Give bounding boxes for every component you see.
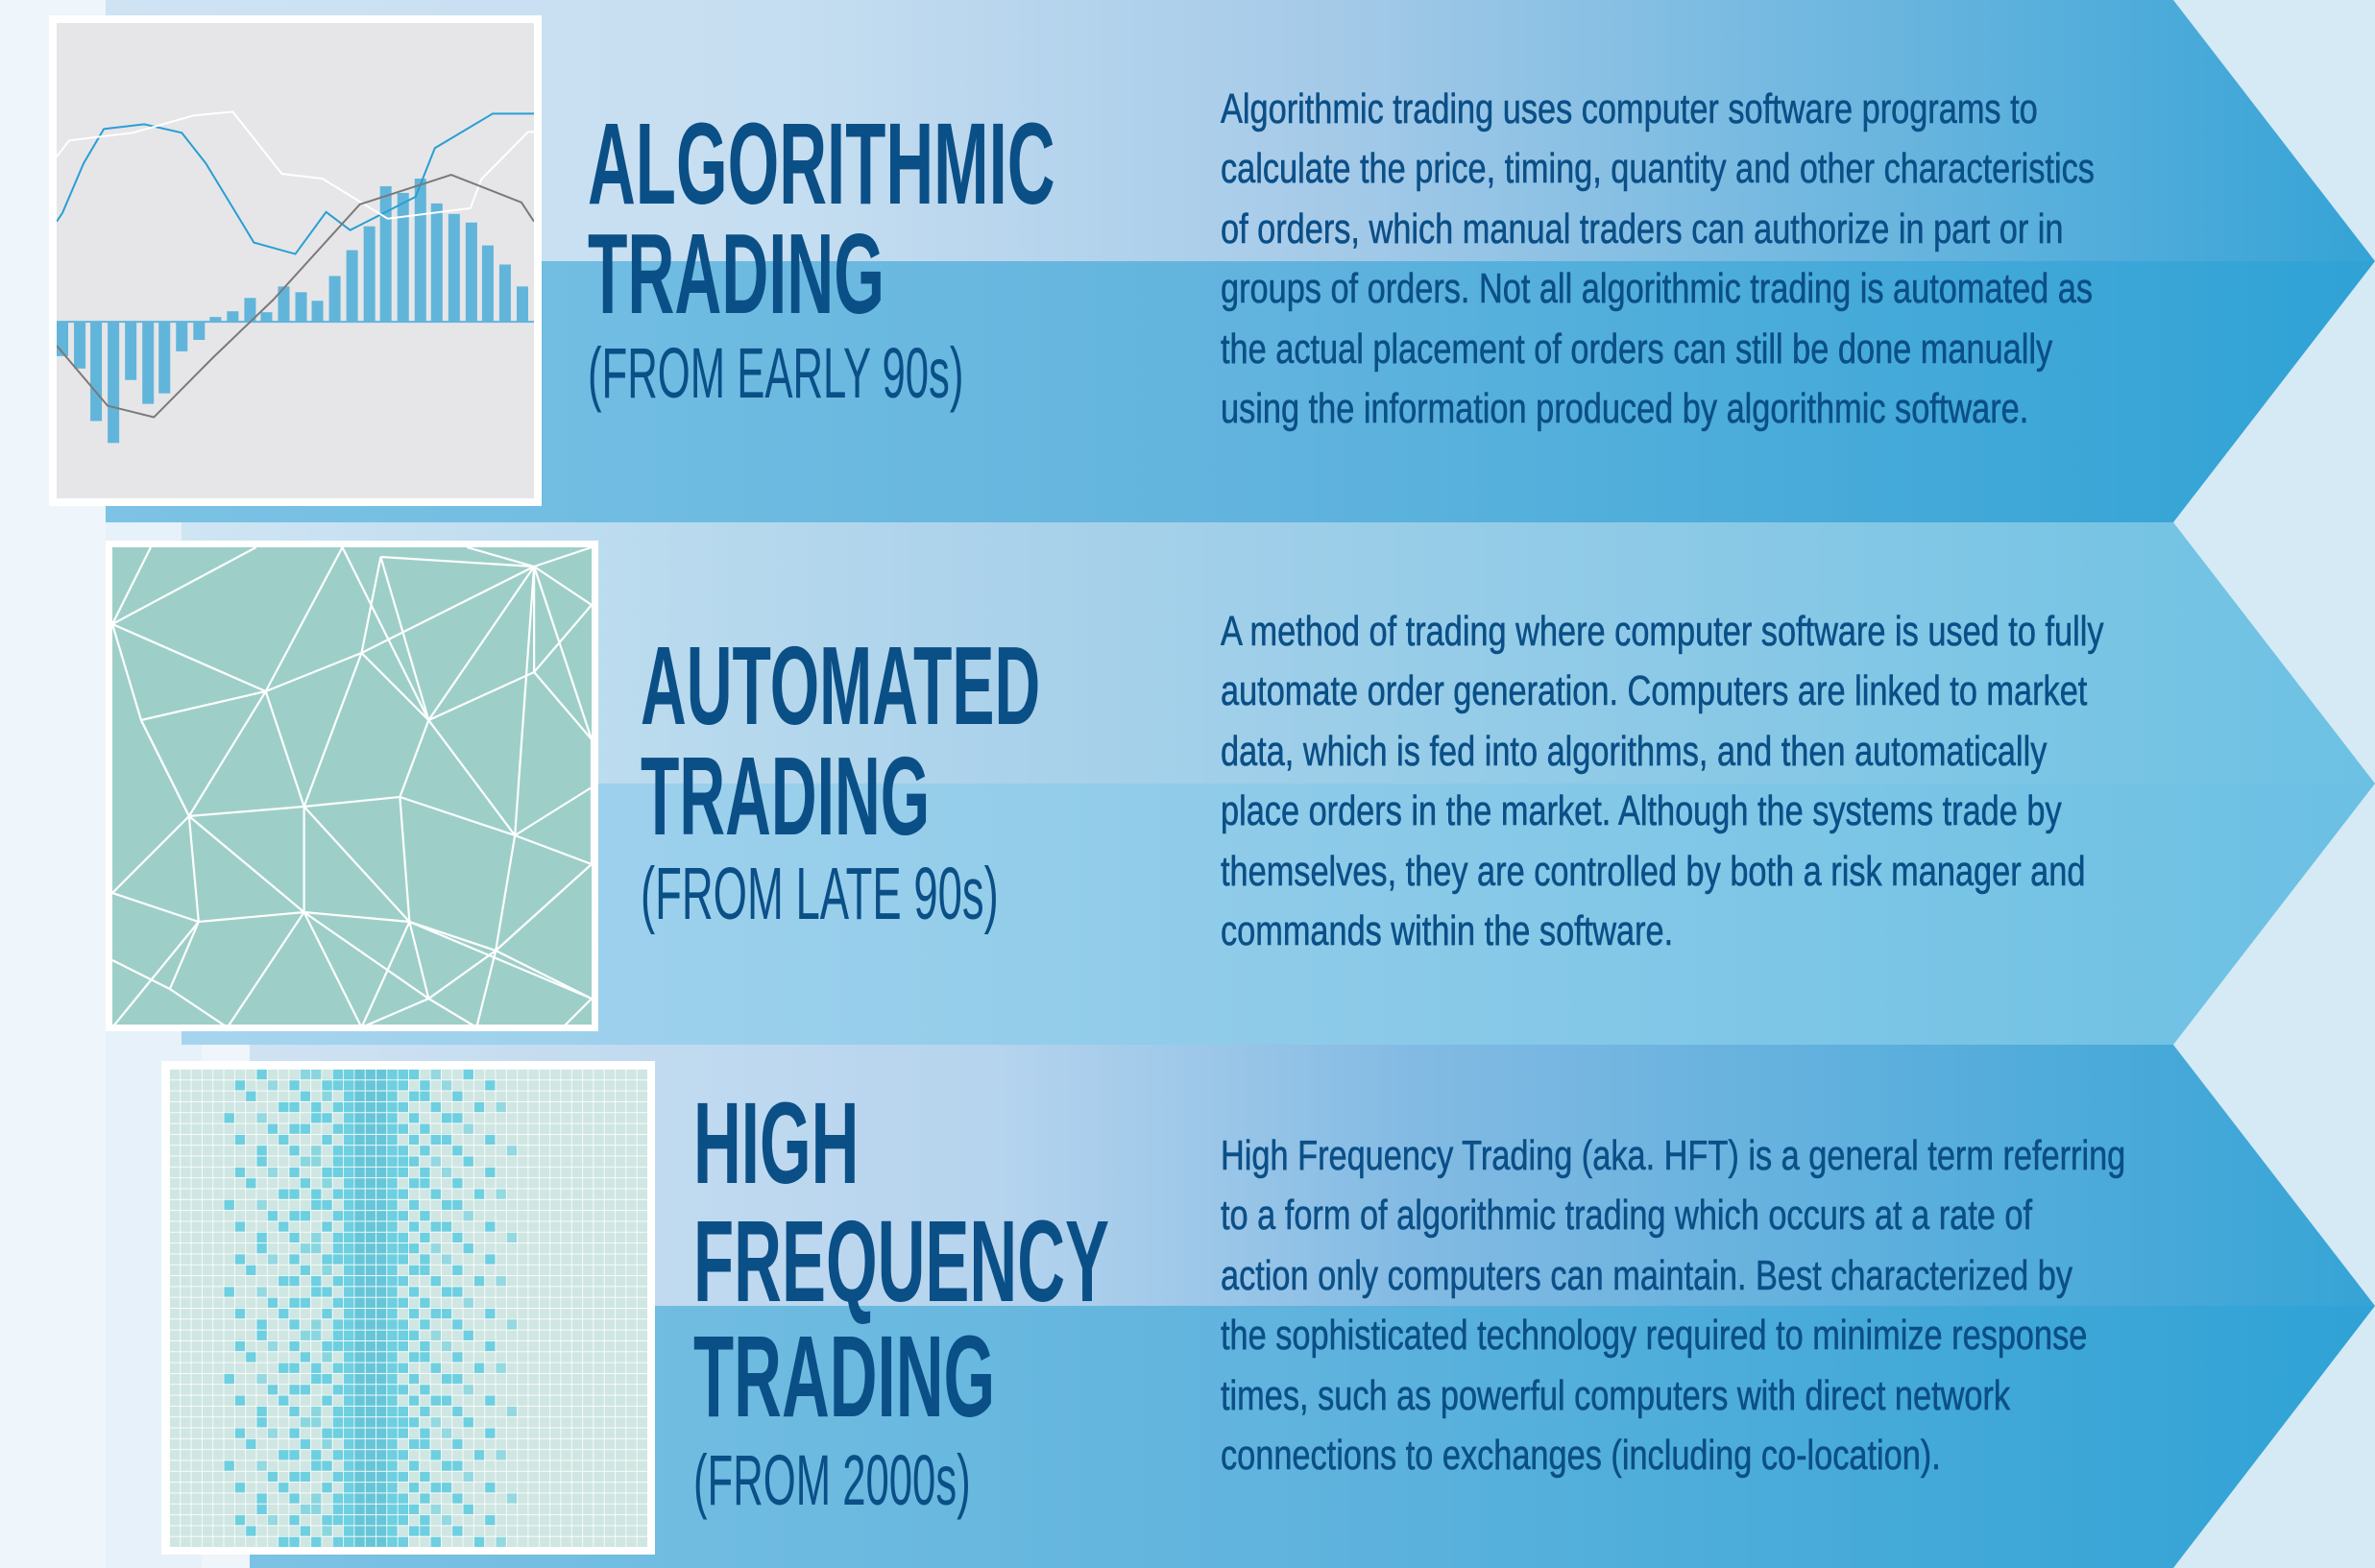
title: algorithmic trading: [588, 98, 1055, 413]
text: high frequency trading description: connections to exchanges (including co-location).: [1221, 1432, 1941, 1479]
text: automated trading description: place orders in the market. Although the systems trade by: [1221, 787, 2062, 834]
text: automated trading description: [1220, 608, 2104, 954]
title: high frequency trading: (FROM 2000s): [693, 1440, 971, 1520]
text: high frequency trading description: the sophisticated technology required to minimize response: [1221, 1312, 2087, 1359]
text: high frequency trading description: action only computers can maintain. Best characterized by: [1221, 1252, 2072, 1299]
title: high frequency trading: FREQUENCY: [693, 1195, 1109, 1326]
text: automated trading description: data, which is fed into algorithms, and then automatically: [1221, 728, 2047, 775]
title: automated trading: TRADING: [641, 734, 930, 858]
text: automated trading description: automate order generation. Computers are linked to market: [1221, 667, 2087, 714]
title: automated trading: (FROM LATE 90s): [641, 853, 999, 935]
text: high frequency trading description: to a form of algorithmic trading which occurs at a rate of: [1221, 1192, 2032, 1239]
chart: algorithmic trading histogram: [49, 15, 542, 506]
title: algorithmic trading: ALGORITHMIC: [588, 98, 1055, 229]
title: algorithmic trading: (FROM EARLY 90s): [588, 333, 963, 413]
text: algorithmic trading description: the actual placement of orders can still be done manually: [1221, 326, 2052, 373]
text: algorithmic trading description: [1220, 85, 2095, 432]
title: high frequency trading: HIGH: [693, 1077, 859, 1208]
title: high frequency trading: [693, 1077, 1109, 1520]
chart: high frequency grid: [161, 1061, 655, 1555]
text: automated trading description: themselves, they are controlled by both a risk manager and: [1221, 848, 2085, 895]
title: high frequency trading: TRADING: [693, 1311, 995, 1441]
text: algorithmic trading description: Algorithmic trading uses computer software programs to: [1221, 85, 2038, 133]
text: algorithmic trading description: calculate the price, timing, quantity and other characteristics: [1221, 145, 2095, 192]
text: algorithmic trading description: of orders, which manual traders can authorize in part or in: [1221, 205, 2064, 253]
text: automated trading description: A method of trading where computer software is used to fully: [1221, 608, 2103, 655]
chart: automated trading network: [106, 541, 598, 1031]
title: algorithmic trading: TRADING: [588, 210, 885, 338]
title: automated trading: [641, 623, 1040, 935]
title: automated trading: AUTOMATED: [641, 623, 1040, 748]
text: algorithmic trading description: groups of orders. Not all algorithmic trading is automated as: [1221, 265, 2093, 312]
text: high frequency trading description: [1221, 1132, 2125, 1479]
text: high frequency trading description: High Frequency Trading (aka. HFT) is a general term referring: [1221, 1132, 2125, 1179]
text: high frequency trading description: times, such as powerful computers with direct network: [1221, 1372, 2010, 1419]
text: automated trading description: commands within the software.: [1221, 907, 1673, 954]
text: algorithmic trading description: using the information produced by algorithmic software.: [1221, 385, 2028, 432]
